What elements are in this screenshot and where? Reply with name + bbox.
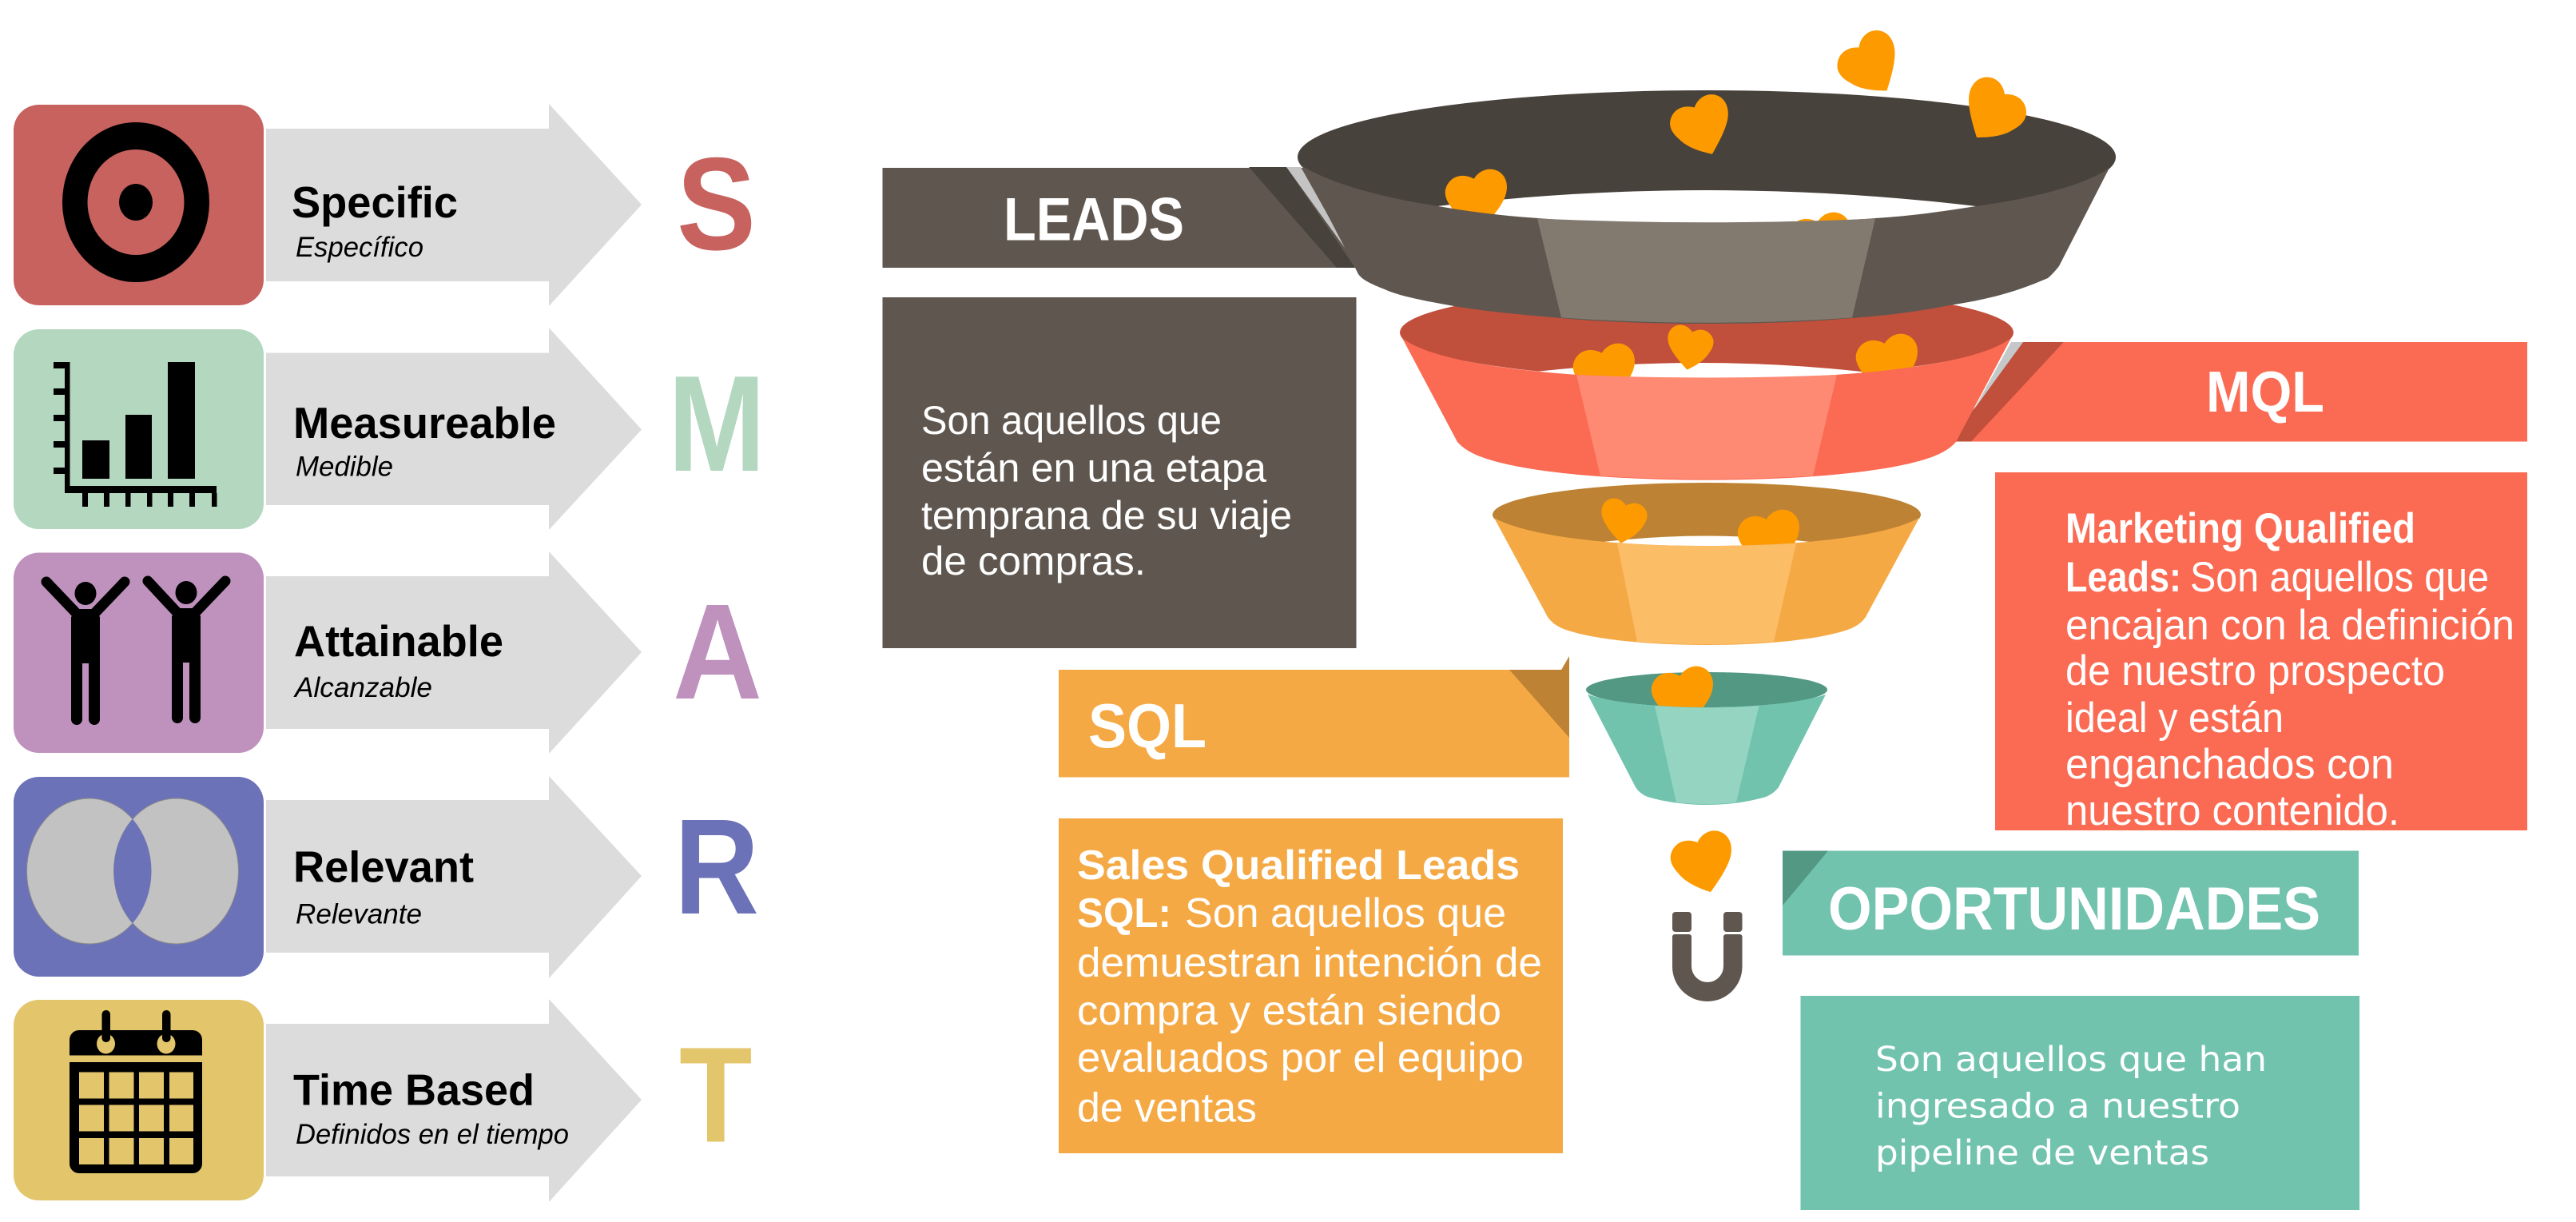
icon box: specific	[14, 105, 264, 305]
panel: MQL description: encajan con la definición	[2065, 602, 2514, 649]
subheading: Medible: Medible	[296, 451, 393, 483]
label: OPORTUNIDADES	[1783, 850, 2359, 956]
label: LEADS: LEADS	[1004, 185, 1184, 254]
funnel stage 4: teal	[1586, 651, 1827, 805]
panel: MQL description: ideal y están	[2065, 695, 2284, 742]
panel: SQL description	[1059, 818, 1563, 1153]
letter T: T	[679, 1020, 753, 1172]
arrow: measureable	[266, 328, 642, 530]
icon box: attainable	[14, 553, 264, 753]
funnel stage 3: orange	[1493, 483, 1921, 645]
arrow: relevant	[266, 776, 642, 978]
panel: MQL description	[1995, 472, 2527, 834]
funnel stage 2: coral	[1400, 286, 2013, 480]
heading: Time Based: Time Based	[293, 1065, 535, 1114]
icon box: measureable	[14, 329, 264, 529]
letter M: M	[668, 348, 765, 500]
panel: OPORTUNIDADES description	[1801, 996, 2359, 1210]
arrow: time based	[266, 999, 642, 1202]
panel: OPORTUNIDADES description: Son aquellos que han	[1875, 1040, 2267, 1080]
panel: LEADS description: Son aquellos que	[921, 398, 1222, 443]
panel: SQL description: de ventas	[1077, 1085, 1257, 1132]
heading: Specific: Specific	[292, 177, 458, 227]
heading: Measureable: Measureable	[293, 398, 556, 448]
panel: SQL description: Sales Qualified Leads	[1077, 842, 1520, 889]
panel: OPORTUNIDADES description: pipeline de ventas	[1875, 1133, 2209, 1173]
icon: calendar	[70, 1010, 202, 1173]
label: MQL: MQL	[2206, 360, 2324, 424]
panel: SMART specific row	[14, 104, 756, 306]
subheading: Relevante: Relevante	[296, 898, 422, 930]
label: MQL	[1950, 342, 2527, 441]
panel: MQL description: enganchados con	[2065, 741, 2394, 788]
panel: SQL description: demuestran intención de	[1077, 940, 1542, 986]
arrow: specific	[266, 104, 642, 306]
letter R: R	[674, 791, 759, 943]
icon: target	[62, 122, 209, 282]
panel: LEADS description: temprana de su viaje	[921, 493, 1292, 538]
panel: MQL description: Leads:	[2065, 554, 2181, 601]
icon: heart top falling	[1838, 30, 1895, 91]
panel: SQL description: SQL:	[1077, 890, 1171, 937]
icon: heart on funnel rim centre	[1665, 87, 1732, 156]
panel: LEADS description	[882, 297, 1357, 648]
label: SQL: SQL	[1088, 691, 1207, 761]
letter S: S	[677, 130, 756, 277]
panel: SMART measureable row	[14, 328, 765, 530]
icon box: relevant	[14, 777, 264, 977]
letter A: A	[673, 576, 762, 728]
panel: SQL description: compra y están siendo	[1077, 988, 1501, 1034]
heading: Attainable: Attainable	[294, 616, 503, 666]
panel: SMART time based row	[14, 999, 753, 1202]
panel: LEADS description: están en una etapa	[921, 446, 1266, 491]
panel: MQL description: Marketing Qualified	[2065, 505, 2415, 552]
icon: two people arms raised	[46, 581, 225, 725]
panel: LEADS description: de compras.	[921, 539, 1146, 583]
icon box: time based	[14, 1000, 264, 1200]
panel: OPORTUNIDADES description: ingresado a nuestro	[1875, 1087, 2240, 1127]
subheading: Específico: Específico	[296, 232, 423, 263]
icon: heart on funnel rim right	[1969, 77, 2026, 137]
label: SQL	[1059, 656, 1569, 777]
icon: magnet	[1672, 912, 1742, 1001]
subheading: Definidos en el tiempo: Definidos en el tiempo	[296, 1119, 569, 1150]
panel: SMART attainable row	[14, 551, 762, 754]
icon: heart dropping from funnel	[1664, 819, 1737, 894]
funnel stage 1: dark	[1298, 90, 2116, 324]
subheading: Alcanzable: Alcanzable	[293, 672, 432, 703]
panel: SQL description: evaluados por el equipo	[1077, 1035, 1524, 1081]
panel: SQL description: Son aquellos que	[1185, 890, 1506, 937]
heading: Relevant: Relevant	[293, 842, 474, 892]
arrow: attainable	[266, 551, 642, 754]
panel: SMART relevant row	[14, 776, 759, 978]
label: LEADS	[882, 167, 1356, 268]
panel: MQL description: nuestro contenido.	[2065, 787, 2399, 834]
icon: bar chart	[54, 362, 217, 507]
icon: venn diagram	[27, 798, 238, 944]
panel: MQL description: de nuestro prospecto	[2065, 647, 2445, 695]
panel: MQL description: Son aquellos que	[2190, 554, 2489, 601]
label: OPORTUNIDADES: OPORTUNIDADES	[1828, 875, 2320, 943]
